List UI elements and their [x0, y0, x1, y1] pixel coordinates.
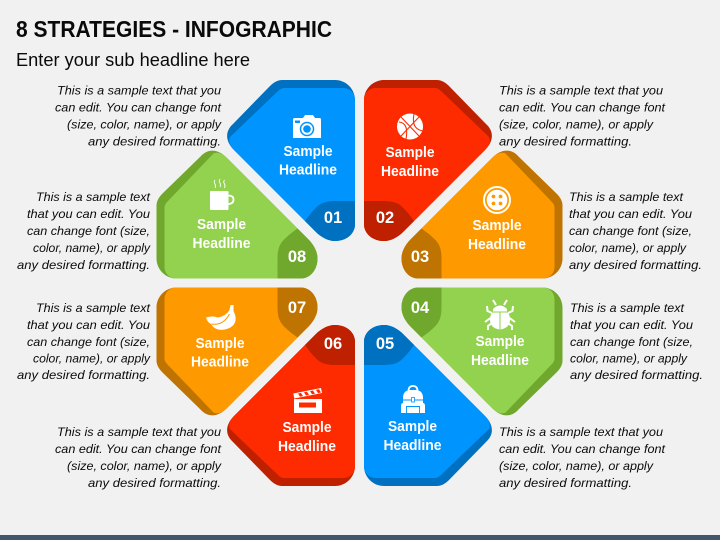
text block: 03	[569, 190, 702, 272]
headline 04: Sample	[476, 334, 524, 350]
icon: bananas	[206, 305, 236, 330]
text block: 07: any desired formatting.	[17, 368, 150, 382]
text block: 02: any desired formatting.	[499, 134, 632, 148]
text block: 06: (size, color, name), or apply	[67, 459, 222, 473]
number 02: 02	[376, 209, 394, 227]
headline 03: Sample	[472, 218, 522, 234]
text block: 02: can edit. You can change font	[499, 100, 666, 114]
panel 08: green upper-left	[156, 151, 318, 278]
headline 04 line 2: Headline	[471, 353, 529, 369]
footer bar	[0, 535, 720, 540]
headline 05: Sample	[388, 419, 437, 435]
text block: 01: can edit. You can change font	[55, 100, 222, 114]
headline 07: Sample	[196, 336, 244, 352]
text block: 08	[17, 190, 151, 272]
text block: 04	[570, 301, 703, 382]
text block: 08: any desired formatting.	[17, 258, 150, 272]
text block: 03: This is a sample text	[569, 190, 684, 204]
icon: bug	[485, 300, 515, 330]
panel 01: blue top-left	[227, 80, 355, 241]
number 08: 08	[288, 248, 306, 266]
text block: 04: that you can edit. You	[570, 318, 693, 332]
text block: 04: can change font (size,	[570, 335, 693, 349]
panel 06: red bottom-left	[227, 325, 355, 486]
headline 05 line 2: Headline	[384, 438, 442, 454]
panel 05: blue bottom-right	[364, 325, 492, 486]
headline 01: Sample	[284, 144, 332, 160]
headline 08: Sample	[197, 217, 246, 233]
text block: 01: This is a sample text that you	[57, 84, 221, 98]
text block: 02: (size, color, name), or apply	[499, 118, 654, 132]
text block: 05: (size, color, name), or apply	[499, 459, 654, 473]
text block: 03: color, name), or apply	[569, 241, 687, 255]
text block: 01	[55, 84, 222, 148]
text block: 03: that you can edit. You	[569, 207, 692, 221]
text block: 05: This is a sample text that you	[499, 425, 663, 439]
number 01: 01	[324, 209, 342, 227]
text block: 06	[55, 425, 222, 490]
number 07: 07	[288, 299, 306, 317]
headline 03 line 2: Headline	[468, 237, 526, 253]
icon: clapperboard	[293, 388, 322, 413]
panel 07: orange lower-left	[156, 288, 318, 415]
icon: backpack	[401, 386, 425, 413]
headline 06 line 2: Headline	[278, 439, 336, 455]
headline 07 line 2: Headline	[191, 354, 249, 370]
text block: 03: any desired formatting.	[569, 258, 702, 272]
panel 03: orange upper-right	[402, 151, 562, 278]
text block: 07: that you can edit. You	[27, 318, 150, 332]
text block: 03: can change font (size,	[569, 224, 692, 238]
text block: 06: This is a sample text that you	[57, 425, 221, 439]
headline 01 line 2: Headline	[279, 162, 337, 178]
text block: 07: can change font (size,	[27, 335, 150, 349]
text block: 08: color, name), or apply	[33, 241, 151, 255]
number 05: 05	[376, 335, 394, 353]
panel 04: green lower-right	[402, 288, 562, 415]
text block: 05: can edit. You can change font	[499, 442, 666, 456]
icon: basketball	[397, 114, 423, 140]
text block: 07	[17, 301, 151, 382]
icon: camera	[293, 115, 321, 138]
headline 08 line 2: Headline	[192, 236, 250, 252]
text block: 04: This is a sample text	[570, 301, 685, 315]
number 03: 03	[411, 248, 429, 266]
panel 02: red top-right	[364, 80, 492, 241]
text block: 07: color, name), or apply	[33, 352, 151, 366]
text block: 02: This is a sample text that you	[499, 84, 663, 98]
text block: 01: (size, color, name), or apply	[67, 118, 222, 132]
text block: 05	[499, 425, 666, 490]
text block: 04: any desired formatting.	[570, 368, 703, 382]
headline 02: Sample	[386, 145, 434, 161]
headline 02 line 2: Headline	[381, 164, 439, 180]
title: 8 STRATEGIES - INFOGRAPHIC	[16, 16, 332, 42]
icon: button	[484, 187, 510, 213]
number 06: 06	[324, 335, 342, 353]
text block: 06: any desired formatting.	[88, 476, 221, 490]
text block: 01: any desired formatting.	[88, 134, 221, 148]
text block: 07: This is a sample text	[36, 301, 151, 315]
icon: coffee cup	[210, 179, 234, 210]
number 04: 04	[411, 299, 430, 317]
text block: 05: any desired formatting.	[499, 476, 632, 490]
text block: 08: This is a sample text	[36, 190, 151, 204]
text block: 04: color, name), or apply	[570, 352, 688, 366]
sub headline: Enter your sub headline here	[16, 50, 250, 70]
text block: 08: that you can edit. You	[27, 207, 150, 221]
text block: 08: can change font (size,	[27, 224, 150, 238]
text block: 02	[499, 84, 666, 148]
headline 06: Sample	[282, 420, 332, 436]
text block: 06: can edit. You can change font	[55, 442, 222, 456]
